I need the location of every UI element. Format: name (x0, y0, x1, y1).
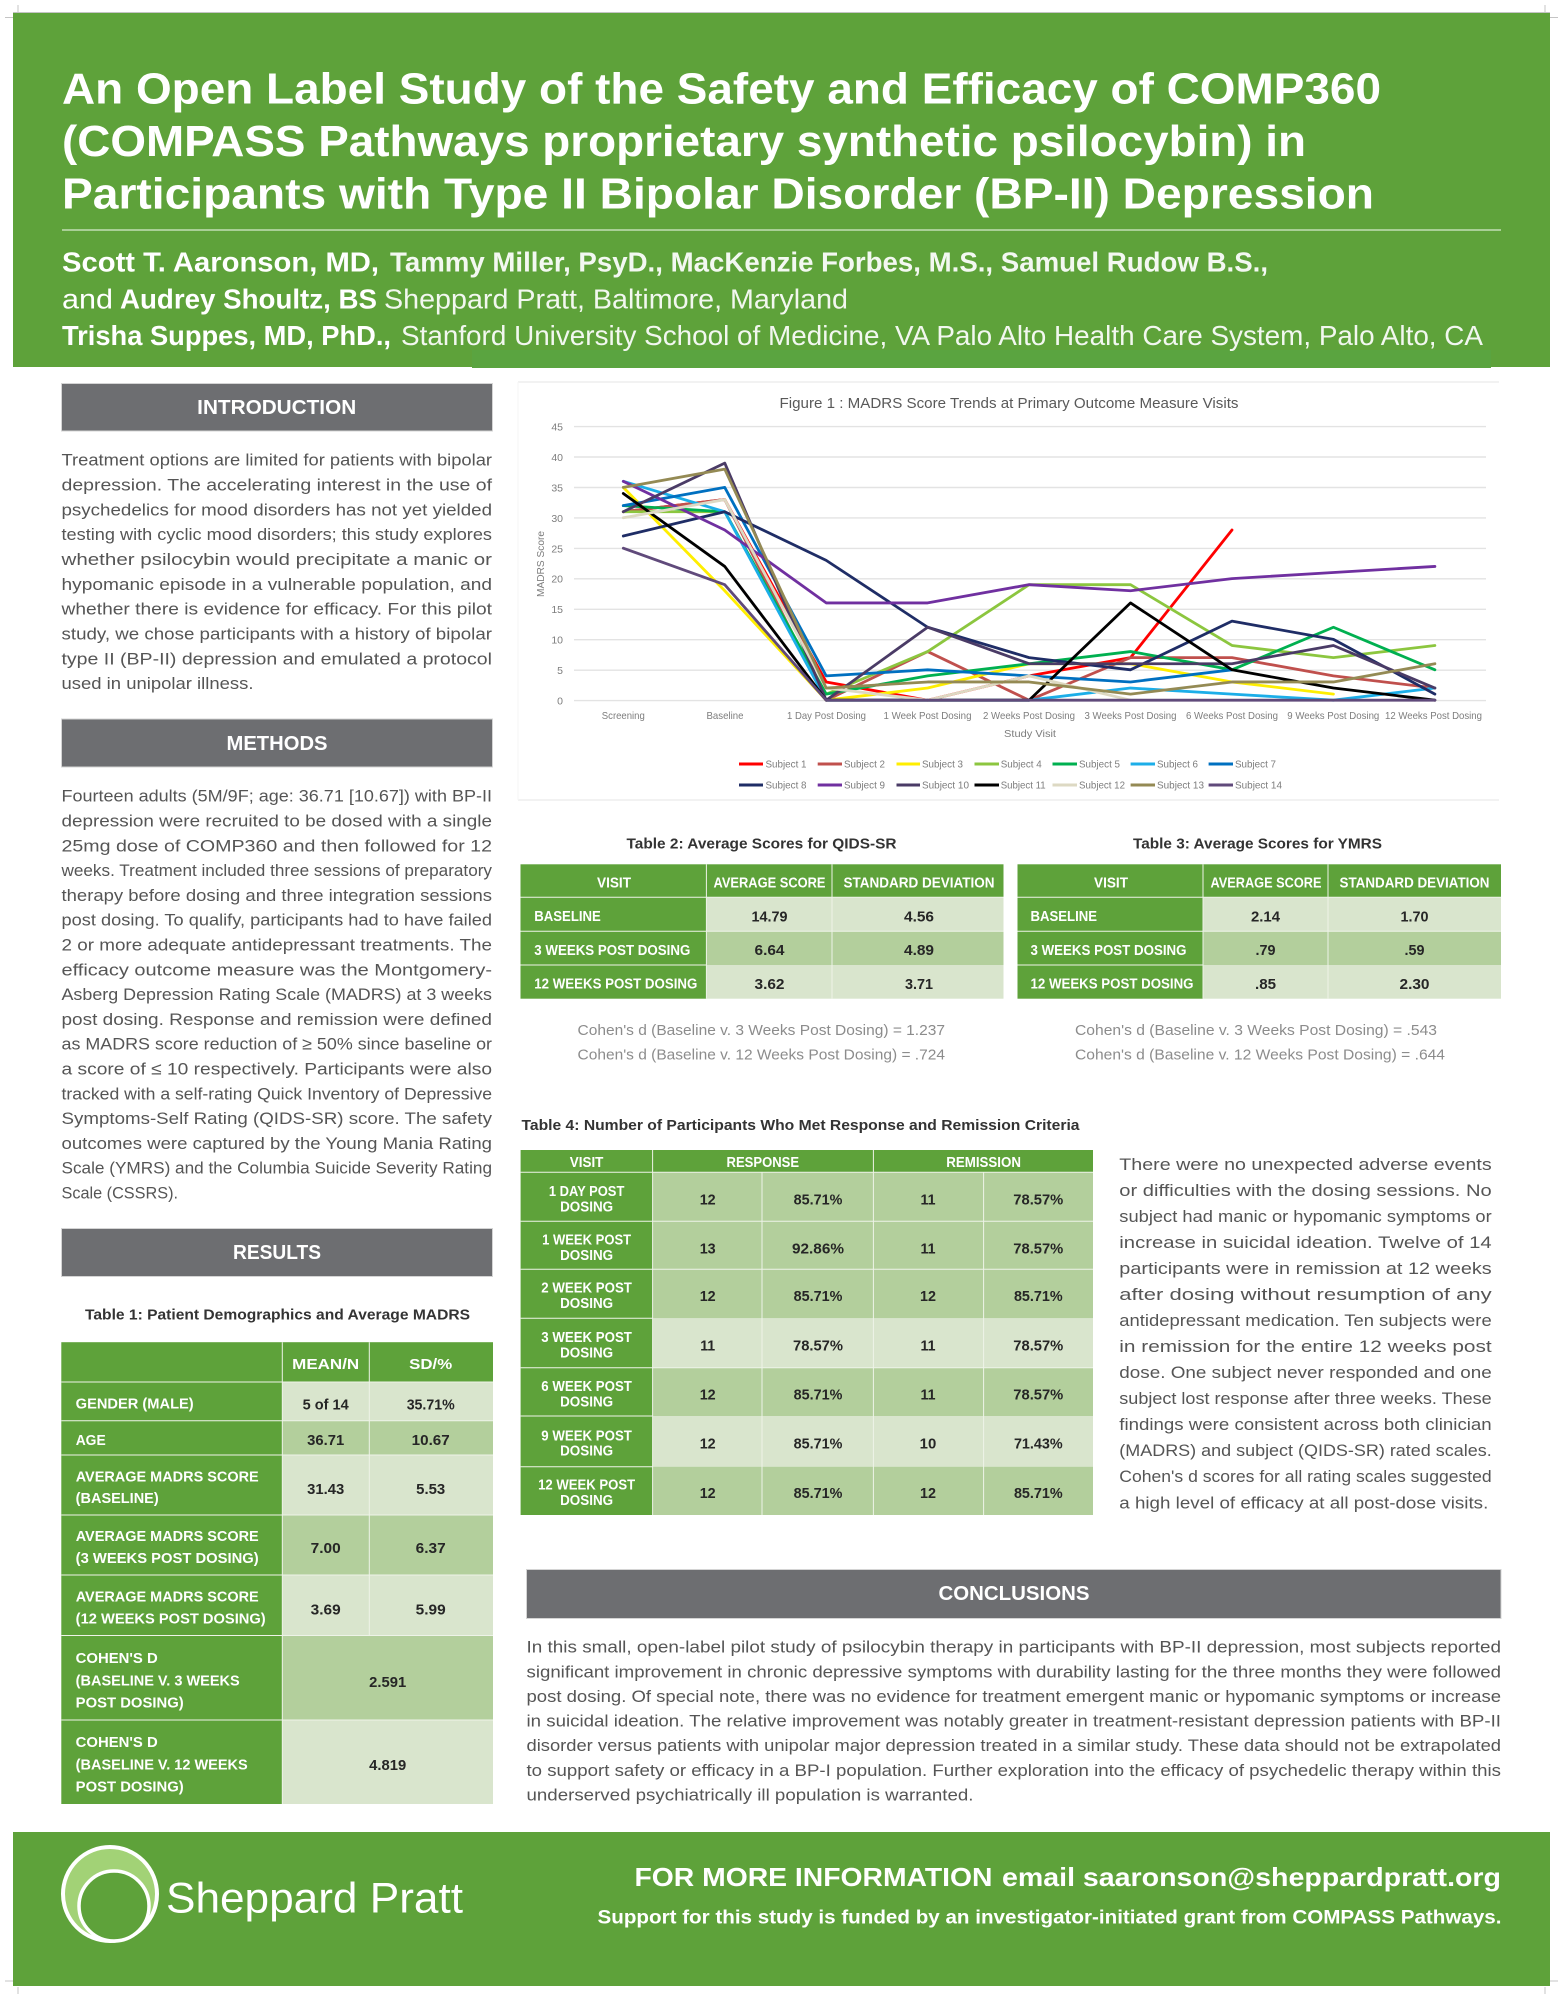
authors and affiliations: Sheppard Pratt, Baltimore, Maryland (384, 283, 848, 314)
table 1: demographics: 31.43 (307, 1482, 344, 1498)
chart legend: Subject 6 (1157, 758, 1198, 770)
contact information: FOR MORE INFORMATION (634, 1862, 992, 1892)
table 2: QIDS-SR: 3 WEEKS POST DOSING (534, 943, 690, 959)
text: results summary: subject lost response after three weeks. These (1119, 1389, 1492, 1408)
text: conclusions body (526, 1638, 1501, 1805)
chart legend: Subject 11 (1001, 779, 1046, 791)
table 2: QIDS-SR: 6.64 (754, 943, 784, 959)
contact information (634, 1862, 1501, 1892)
table 1: demographics: (BASELINE) (76, 1491, 159, 1507)
x axis labels: 3 Weeks Post Dosing (1084, 710, 1177, 722)
x axis labels: 9 Weeks Post Dosing (1287, 710, 1379, 722)
panel: results left column (61, 1228, 493, 1804)
table 3 title: Table 3: Average Scores for YMRS (1133, 835, 1382, 852)
table 3: YMRS (1018, 864, 1501, 999)
text: results summary: Cohen's d scores for all rating scales suggested (1119, 1467, 1492, 1486)
table 3: YMRS: STANDARD DEVIATION (1340, 875, 1490, 891)
text: introduction body: type II (BP-II) depression and emulated a protocol (62, 649, 492, 668)
text: results summary: (MADRS) and subject (QIDS-SR) rated scales. (1119, 1441, 1492, 1460)
text: methods body: Symptoms-Self Rating (QIDS-SR) score. The safety (62, 1109, 493, 1128)
table 1: demographics: 3.69 (311, 1602, 341, 1618)
subject lines (623, 463, 1435, 700)
table 1: demographics: POST DOSING) (76, 1780, 184, 1796)
chart legend (739, 758, 1282, 791)
table 1: demographics: 2.591 (369, 1675, 406, 1691)
table 4: response and remission: 92.86% (792, 1241, 844, 1257)
title: An Open Label Study of the Safety and Efficacy of COMP360 (62, 64, 1381, 113)
authors and affiliations: Scott T. Aaronson, MD, (62, 247, 379, 278)
heading: results (62, 1228, 492, 1276)
chart legend: Subject 10 (922, 779, 969, 791)
text: conclusions body: to support safety or efficacy in a BP-I population. Further exploration into the efficacy of psychedelic therapy within this (526, 1761, 1501, 1780)
table 2: QIDS-SR: 12 WEEKS POST DOSING (534, 976, 697, 992)
text: results summary: after dosing without resumption of any (1119, 1285, 1492, 1304)
table 2: QIDS-SR: STANDARD DEVIATION (844, 875, 994, 891)
panel: conclusions (526, 1570, 1501, 1805)
table 4: response and remission: DOSING (560, 1493, 613, 1509)
table 2: QIDS-SR: 14.79 (752, 910, 788, 926)
x axis labels: 1 Day Post Dosing (787, 710, 866, 722)
table 1: demographics: (3 WEEKS POST DOSING) (76, 1551, 259, 1567)
table 4: response and remission: RESPONSE (727, 1155, 799, 1171)
header banner (13, 13, 1550, 368)
table 2 cohen's d notes (578, 1022, 945, 1063)
table 1: demographics: 35.71% (407, 1398, 455, 1414)
y axis title: MADRS Score (535, 531, 547, 597)
text: introduction body: psychedelics for mood disorders has not yet yielded (62, 500, 492, 519)
x axis labels: 1 Week Post Dosing (884, 710, 972, 722)
title: (COMPASS Pathways proprietary synthetic psilocybin) in (62, 117, 1306, 166)
table 4: response and remission: REMISSION (946, 1155, 1021, 1171)
table 1: demographics: 5.53 (416, 1482, 445, 1498)
table 4: response and remission (521, 1150, 1093, 1515)
text: results summary: increase in suicidal ideation. Twelve of 14 (1119, 1233, 1492, 1252)
text: methods body: efficacy outcome measure was the Montgomery- (62, 960, 492, 979)
table 2 cohen's d notes: Cohen's d (Baseline v. 12 Weeks Post Dosing) = .724 (578, 1046, 945, 1063)
text: methods body: Scale (CSSRS). (62, 1184, 178, 1202)
chart title: Figure 1 : MADRS Score Trends at Primary Outcome Measure Visits (780, 396, 1238, 412)
table 4: response and remission: 12 (700, 1437, 716, 1453)
text: methods body: Scale (YMRS) and the Columbia Suicide Severity Rating (62, 1159, 492, 1178)
text: methods body: post dosing. Response and remission were defined (62, 1010, 492, 1029)
text: methods body: Fourteen adults (5M/9F; age: 36.71 [10.67]) with BP-II (62, 787, 492, 806)
heading: introduction: INTRODUCTION (197, 397, 356, 419)
table 4: response and remission: 6 WEEK POST (541, 1379, 632, 1395)
x axis labels: Study Visit (1004, 728, 1056, 740)
text: introduction body: testing with cyclic mood disorders; this study explores (62, 525, 492, 544)
text: conclusions body: significant improvement in chronic depressive symptoms with durability lasting for the three months they were followed (526, 1662, 1501, 1681)
table 4: response and remission: 85.71% (1014, 1289, 1063, 1305)
text: methods body (60, 787, 493, 1202)
text: results summary: dose. One subject never responded and one (1119, 1363, 1492, 1382)
table 4: response and remission: 78.57% (1013, 1241, 1063, 1257)
table 1: demographics: MEAN/N (292, 1357, 359, 1373)
table 4: response and remission: DOSING (560, 1296, 613, 1312)
table 2: QIDS-SR: 4.56 (904, 910, 934, 926)
panel: methods (60, 719, 493, 1202)
chart legend: Subject 14 (1235, 779, 1282, 791)
chart legend: Subject 12 (1079, 779, 1125, 791)
table 3 cohen's d notes (1075, 1022, 1445, 1063)
heading: conclusions (526, 1570, 1501, 1618)
y axis labels: 25 (551, 543, 563, 555)
table 3: YMRS: BASELINE (1030, 909, 1097, 925)
y axis labels: 20 (551, 574, 563, 586)
chart legend: Subject 1 (766, 758, 807, 770)
table 1: demographics: COHEN'S D (76, 1651, 158, 1667)
chart legend: Subject 3 (922, 758, 963, 770)
table 4: response and remission: 2 WEEK POST (541, 1281, 632, 1297)
table 1: demographics: AVERAGE MADRS SCORE (76, 1590, 259, 1606)
text: conclusions body: in suicidal ideation. The relative improvement was notably greater in treatment-resistant depression patients with BP-II (526, 1712, 1501, 1731)
chart legend: Subject 9 (844, 779, 885, 791)
panel: introduction (60, 384, 493, 693)
table 3: YMRS: 3 WEEKS POST DOSING (1030, 943, 1186, 959)
table 4: response and remission: DOSING (560, 1345, 613, 1361)
table 4: response and remission: 78.57% (793, 1339, 843, 1355)
funding statement: Support for this study is funded by an investigator-initiated grant from COMPASS Pathways. (598, 1907, 1502, 1928)
text: introduction body: whether psilocybin would precipitate a manic or (60, 550, 492, 569)
icon: Sheppard Pratt logo (63, 1847, 157, 1941)
table 3: YMRS: .79 (1256, 943, 1276, 959)
table 1: demographics: (12 WEEKS POST DOSING) (76, 1612, 266, 1628)
table 3: YMRS: 2.14 (1251, 910, 1280, 926)
text: introduction body (60, 451, 492, 693)
table 3: YMRS: 1.70 (1400, 910, 1428, 926)
table 4: response and remission: 12 (700, 1486, 716, 1502)
table 1: demographics: 36.71 (307, 1433, 344, 1449)
chart legend: Subject 2 (844, 758, 885, 770)
table 1: demographics: (BASELINE V. 3 WEEKS (76, 1673, 240, 1689)
table 1: demographics: SD/% (409, 1357, 452, 1373)
table 4: response and remission: 85.71% (794, 1437, 842, 1453)
table 4: response and remission: 12 (920, 1486, 936, 1502)
chart: figure 1 MADRS score trends (518, 382, 1499, 800)
y axis labels: 5 (557, 665, 563, 677)
table 1: demographics: 4.819 (369, 1758, 406, 1774)
table 1: demographics (61, 1342, 493, 1804)
text: methods body: 25mg dose of COMP360 and then followed for 12 (62, 836, 492, 855)
chart legend: Subject 7 (1235, 758, 1276, 770)
heading: methods: METHODS (226, 733, 328, 755)
y axis labels (551, 422, 563, 708)
table 4: response and remission: 78.57% (1013, 1388, 1063, 1404)
table 4: response and remission: 11 (920, 1241, 936, 1257)
table 3: YMRS: .59 (1404, 943, 1424, 959)
chart legend: Subject 5 (1079, 758, 1120, 770)
chart legend: Subject 8 (766, 779, 807, 791)
table 4: response and remission: 10 (920, 1437, 936, 1453)
table 4: response and remission: 9 WEEK POST (541, 1428, 632, 1444)
text: methods body: weeks. Treatment included three sessions of preparatory (60, 861, 493, 880)
table 2: QIDS-SR: 4.89 (904, 943, 934, 959)
table 1: demographics: 10.67 (412, 1433, 450, 1449)
table 2 title: Table 2: Average Scores for QIDS-SR (626, 835, 897, 852)
authors and affiliations: Trisha Suppes, MD, PhD., (62, 320, 391, 351)
authors and affiliations: Stanford University School of Medicine, VA Palo Alto Health Care System, Palo Alto, CA (401, 320, 1484, 351)
text: methods body: outcomes were captured by the Young Mania Rating (62, 1134, 492, 1153)
text: methods body: 2 or more adequate antidepressant treatments. The (62, 936, 492, 954)
heading: conclusions: CONCLUSIONS (938, 1583, 1090, 1605)
table 4: response and remission: 1 DAY POST (549, 1184, 624, 1200)
table 4: response and remission: 78.57% (1013, 1339, 1063, 1355)
chart legend: Subject 4 (1001, 758, 1042, 770)
text: results summary: subject had manic or hypomanic symptoms or (1119, 1207, 1492, 1226)
text: introduction body: study, we chose participants with a history of bipolar (62, 624, 492, 644)
y axis labels: 0 (557, 696, 563, 708)
authors and affiliations: Audrey Shoultz, BS (120, 283, 377, 314)
text: methods body: depression were recruited to be dosed with a single (62, 812, 492, 830)
table 1: demographics: AGE (76, 1433, 106, 1449)
table 4: response and remission: DOSING (560, 1394, 613, 1410)
text: methods body: post dosing. To qualify, participants had to have failed (62, 911, 492, 930)
table 2: QIDS-SR: 3.71 (905, 977, 933, 993)
x axis labels: 2 Weeks Post Dosing (983, 710, 1075, 722)
table 1 title: Table 1: Patient Demographics and Average MADRS (85, 1306, 470, 1323)
footer banner (13, 1832, 1550, 1986)
table 1: demographics: AVERAGE MADRS SCORE (76, 1470, 259, 1486)
text: results summary (1119, 1155, 1492, 1512)
table 2: QIDS-SR: BASELINE (534, 909, 601, 925)
text: introduction body: hypomanic episode in a vulnerable population, and (62, 575, 492, 594)
table 1: demographics: GENDER (MALE) (76, 1396, 194, 1412)
text: introduction body: whether there is evidence for efficacy. For this pilot (60, 600, 492, 619)
table 4: response and remission: 11 (920, 1339, 936, 1355)
y axis labels: 35 (551, 482, 563, 494)
chart legend: Subject 13 (1157, 779, 1204, 791)
text: introduction body: depression. The accelerating interest in the use of (62, 476, 492, 494)
heading: results: RESULTS (233, 1242, 321, 1264)
title (62, 64, 1381, 218)
table 3: YMRS: VISIT (1094, 875, 1128, 891)
table 4: response and remission: 12 WEEK POST (538, 1478, 635, 1494)
table 4: response and remission: 85.71% (794, 1289, 842, 1305)
table 4: response and remission: 71.43% (1014, 1437, 1063, 1453)
text: conclusions body: disorder versus patients with unipolar major depression treated in a similar study. These data should not be extrapolated (526, 1736, 1501, 1755)
logo wordmark: Sheppard Pratt (166, 1875, 463, 1923)
table 4 title: Table 4: Number of Participants Who Met Response and Remission Criteria (522, 1117, 1080, 1134)
text: introduction body: Treatment options are limited for patients with bipolar (62, 451, 492, 470)
table 4: response and remission: 11 (920, 1192, 936, 1208)
table 1: demographics: AVERAGE MADRS SCORE (76, 1529, 259, 1545)
table 4: response and remission: 12 (700, 1192, 716, 1208)
table 4: response and remission: 13 (700, 1241, 716, 1257)
authors and affiliations: and (62, 283, 113, 314)
table 2: QIDS-SR: 3.62 (754, 977, 784, 993)
table 1: demographics: 7.00 (311, 1541, 341, 1557)
text: methods body: as MADRS score reduction of ≥ 50% since baseline or (62, 1035, 492, 1054)
text: results summary: There were no unexpected adverse events (1119, 1155, 1492, 1174)
table 2 cohen's d notes: Cohen's d (Baseline v. 3 Weeks Post Dosing) = 1.237 (578, 1022, 945, 1039)
y axis labels: 15 (551, 604, 563, 616)
table 4: response and remission: 85.71% (794, 1388, 842, 1404)
table 1: demographics: 5 of 14 (303, 1398, 349, 1414)
table 1: demographics: (BASELINE V. 12 WEEKS (76, 1758, 248, 1774)
table 3 cohen's d notes: Cohen's d (Baseline v. 12 Weeks Post Dosing) = .644 (1075, 1046, 1445, 1063)
x axis labels: Baseline (706, 710, 744, 722)
text: results summary: a high level of efficacy at all post-dose visits. (1119, 1493, 1488, 1512)
text: results summary: in remission for the entire 12 weeks post (1119, 1337, 1492, 1356)
table 4: response and remission: 85.71% (1014, 1486, 1063, 1502)
table 4: response and remission: DOSING (560, 1199, 613, 1215)
table 4: response and remission: 11 (920, 1388, 936, 1404)
table 4: response and remission: DOSING (560, 1444, 613, 1460)
x axis labels: 6 Weeks Post Dosing (1186, 710, 1278, 722)
table 4: response and remission: 11 (700, 1339, 715, 1355)
x axis labels (602, 710, 1482, 740)
text: results summary: findings were consistent across both clinician (1119, 1415, 1492, 1434)
text: methods body: a score of ≤ 10 respectively. Participants were also (62, 1060, 492, 1078)
table 1: demographics: POST DOSING) (76, 1695, 184, 1711)
table 4: response and remission: 1 WEEK POST (542, 1233, 631, 1249)
table 2: QIDS-SR: AVERAGE SCORE (714, 875, 826, 891)
heading: methods (62, 719, 492, 767)
text: results summary: participants were in remission at 12 weeks (1119, 1259, 1492, 1278)
text: results summary: or difficulties with the dosing sessions. No (1119, 1181, 1492, 1200)
contact information: email saaronson@sheppardpratt.org (1002, 1862, 1501, 1892)
y axis labels: 40 (551, 452, 563, 464)
table 3: YMRS: 12 WEEKS POST DOSING (1030, 976, 1194, 992)
text: introduction body: used in unipolar illness. (62, 674, 254, 693)
text: conclusions body: post dosing. Of special note, there was no evidence for treatment emergent manic or hypomanic symptoms or increase (526, 1687, 1501, 1706)
x axis labels: 12 Weeks Post Dosing (1385, 710, 1482, 722)
text: methods body: Asberg Depression Rating Scale (MADRS) at 3 weeks (62, 985, 492, 1004)
table 2: QIDS-SR: VISIT (597, 875, 631, 891)
table 4: response and remission: 85.71% (794, 1192, 842, 1208)
table 4: response and remission: DOSING (560, 1248, 613, 1264)
table 1: demographics: COHEN'S D (76, 1735, 158, 1751)
table 4: response and remission: VISIT (570, 1155, 604, 1171)
table 4: response and remission: 12 (920, 1289, 936, 1305)
y axis labels: 30 (551, 513, 563, 525)
title: Participants with Type II Bipolar Disorder (BP-II) Depression (62, 169, 1374, 218)
text: results summary: antidepressant medication. Ten subjects were (1119, 1311, 1492, 1330)
table 4: response and remission: 12 (700, 1289, 716, 1305)
table 3: YMRS: .85 (1255, 977, 1276, 993)
table 4: response and remission: 12 (700, 1388, 716, 1404)
authors and affiliations: Tammy Miller, PsyD., MacKenzie Forbes, M.S., Samuel Rudow B.S., (390, 247, 1268, 278)
table 3: YMRS: AVERAGE SCORE (1210, 875, 1322, 891)
authors and affiliations (62, 247, 1484, 351)
table 4: response and remission: 78.57% (1013, 1192, 1063, 1208)
table 1: demographics: 6.37 (416, 1541, 446, 1557)
table 1: demographics: 5.99 (416, 1602, 446, 1618)
text: conclusions body: underserved psychiatrically ill population is warranted. (526, 1786, 974, 1805)
table 2: QIDS-SR (520, 864, 1004, 999)
text: conclusions body: In this small, open-label pilot study of psilocybin therapy in participants with BP-II depression, most subjects reported (526, 1638, 1501, 1657)
text: methods body: therapy before dosing and three integration sessions (62, 886, 492, 905)
table 3 cohen's d notes: Cohen's d (Baseline v. 3 Weeks Post Dosing) = .543 (1075, 1022, 1437, 1039)
table 4: response and remission: 85.71% (794, 1486, 842, 1502)
heading: introduction (62, 384, 492, 431)
text: methods body: tracked with a self-rating Quick Inventory of Depressive (62, 1084, 492, 1103)
y axis labels: 10 (551, 635, 563, 647)
table 4: response and remission: 3 WEEK POST (541, 1330, 632, 1346)
table 3: YMRS: 2.30 (1400, 977, 1430, 993)
x axis labels: Screening (602, 710, 645, 722)
y axis labels: 45 (551, 422, 563, 434)
